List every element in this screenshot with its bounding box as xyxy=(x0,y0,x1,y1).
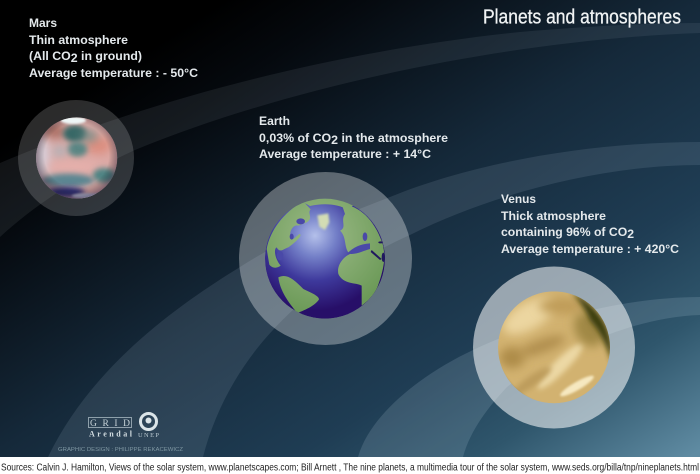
text block: Mars xyxy=(29,16,198,80)
planet: Earth xyxy=(265,197,385,319)
text block: Earth: 0,03% of CO xyxy=(259,131,328,145)
Greenland xyxy=(317,213,329,230)
text block: Venus: Thick atmosphere xyxy=(501,209,606,223)
text block: Venus xyxy=(501,192,679,256)
logo: UNEP xyxy=(138,414,159,439)
logo: GRID Arendal: GRID xyxy=(90,419,130,429)
text block: Earth: in the atmosphere xyxy=(338,131,448,145)
planet: Venus xyxy=(494,290,612,408)
logo: UNEP: UNEP xyxy=(138,432,159,439)
text block: Earth: 2 xyxy=(331,133,339,147)
text block: Earth: Earth xyxy=(259,114,290,128)
text block: Mars: (All CO xyxy=(29,49,69,63)
text block: Mars: 2 xyxy=(71,51,78,65)
text block: Earth: Average temperature : + 14°C xyxy=(259,147,432,161)
logo: GRID Arendal xyxy=(88,418,133,438)
text block: Mars: Mars xyxy=(29,16,57,30)
atmosphere ring: Venus xyxy=(473,266,635,428)
text block: Venus: Venus xyxy=(501,192,536,206)
text block: Venus: Average temperature : + 420°C xyxy=(501,242,679,256)
planet: Mars xyxy=(33,117,117,199)
atmosphere ring: Earth xyxy=(239,172,412,345)
footer: sources xyxy=(0,457,700,474)
text block: Mars: Average temperature : - 50°C xyxy=(29,66,198,80)
atmosphere ring: Mars xyxy=(18,100,134,216)
text block: Earth xyxy=(259,114,448,161)
text block: Mars: Thin atmosphere xyxy=(29,33,128,47)
inland seas xyxy=(277,218,385,262)
logo: GRID Arendal: Arendal xyxy=(89,430,133,438)
orbit band: Venus xyxy=(358,297,700,457)
graphic design credit: GRAPHIC DESIGN : PHILIPPE REKACEWICZ xyxy=(58,447,183,453)
orbit band: Mars xyxy=(0,23,700,237)
text block: Venus: containing 96% of CO xyxy=(501,225,623,239)
text block: Mars: in ground) xyxy=(78,49,142,63)
orbit band: Earth xyxy=(48,142,700,457)
text block: Venus: 2 xyxy=(627,227,634,241)
land masses xyxy=(267,197,384,313)
